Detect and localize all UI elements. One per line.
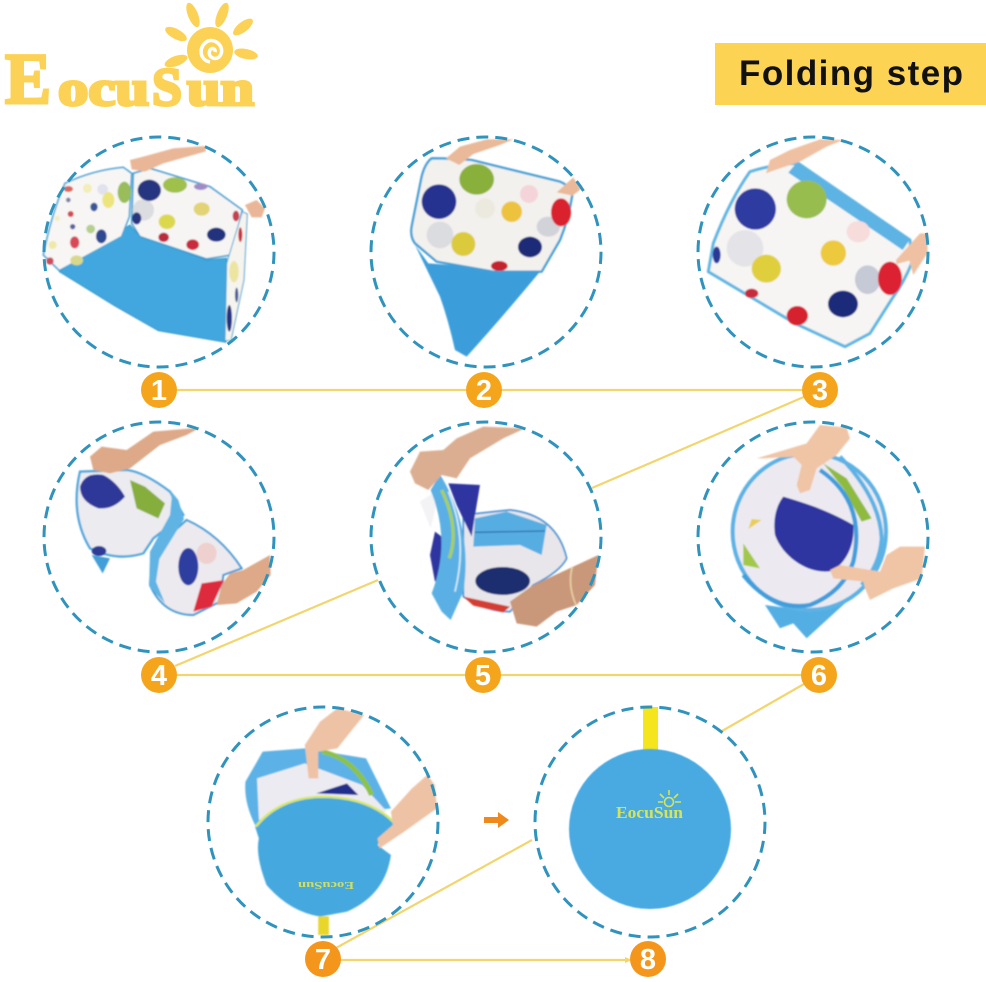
back wall [132, 168, 242, 259]
panel: step 5 photo [410, 427, 598, 627]
badge 7 [305, 941, 341, 977]
badge 8: 8 [640, 944, 656, 976]
badge 2 [466, 372, 502, 408]
logo wordmark: E [5, 39, 51, 119]
dotted fabric [411, 158, 572, 272]
dotted fabric [708, 163, 912, 347]
pouch logo: EocuSun [616, 803, 684, 822]
badge 5 [465, 657, 501, 693]
badge 3 [802, 372, 838, 408]
logo wordmark: un [187, 60, 254, 116]
badge 3: 3 [812, 375, 828, 407]
badge 5: 5 [475, 660, 491, 692]
badge 1: 1 [151, 375, 167, 407]
panel: step 6 photo [733, 425, 925, 638]
connector lines [159, 390, 820, 963]
panel: step 7 photo [245, 708, 437, 935]
icon: sun [163, 1, 259, 73]
folded hoops [431, 474, 466, 620]
panel: step 3 photo [708, 139, 928, 347]
panel: step 8 photo [569, 707, 731, 909]
hands [90, 428, 271, 605]
badge 6 [801, 657, 837, 693]
badge 1 [141, 372, 177, 408]
badge 4 [141, 657, 177, 693]
side wall [225, 212, 247, 341]
hands [446, 139, 581, 196]
pull strap [643, 707, 658, 757]
folded pouch [569, 749, 731, 909]
floor fabric [59, 225, 227, 342]
left wall [43, 167, 132, 271]
hands [757, 425, 925, 600]
hands [766, 139, 928, 275]
badge 4: 4 [151, 660, 167, 692]
panel: step 2 photo [411, 139, 581, 357]
dashed step circles [44, 137, 928, 937]
step number badges [141, 372, 838, 977]
icon: orange arrow [484, 812, 509, 828]
heading: Folding step [715, 43, 986, 105]
zip pouch front [255, 797, 395, 917]
fabric base [415, 245, 540, 357]
hands [305, 708, 437, 848]
folded fabric body [420, 483, 567, 612]
left lobe [77, 470, 183, 573]
heading: Folding step: Folding step [739, 54, 963, 93]
blue flaps [765, 582, 865, 638]
logo wordmark [5, 39, 254, 119]
pull strap [318, 916, 329, 935]
pouch logo sun [658, 790, 681, 806]
right lobe [149, 490, 242, 615]
logo wordmark: ocu [58, 60, 149, 116]
badge 2: 2 [476, 375, 492, 407]
logo: EocuSun [5, 1, 259, 119]
hoop bundle [733, 453, 886, 610]
badge 6: 6 [811, 660, 827, 692]
panel: step 4 photo [77, 428, 271, 615]
panel: step 1 photo [43, 146, 265, 342]
hands [130, 146, 265, 217]
upside-down pouch logo: EocuSun [297, 879, 354, 890]
logo wordmark: S [152, 57, 182, 117]
back of bundle [245, 748, 391, 825]
hands [410, 427, 598, 627]
badge 8 [630, 941, 666, 977]
badge 7: 7 [315, 944, 331, 976]
